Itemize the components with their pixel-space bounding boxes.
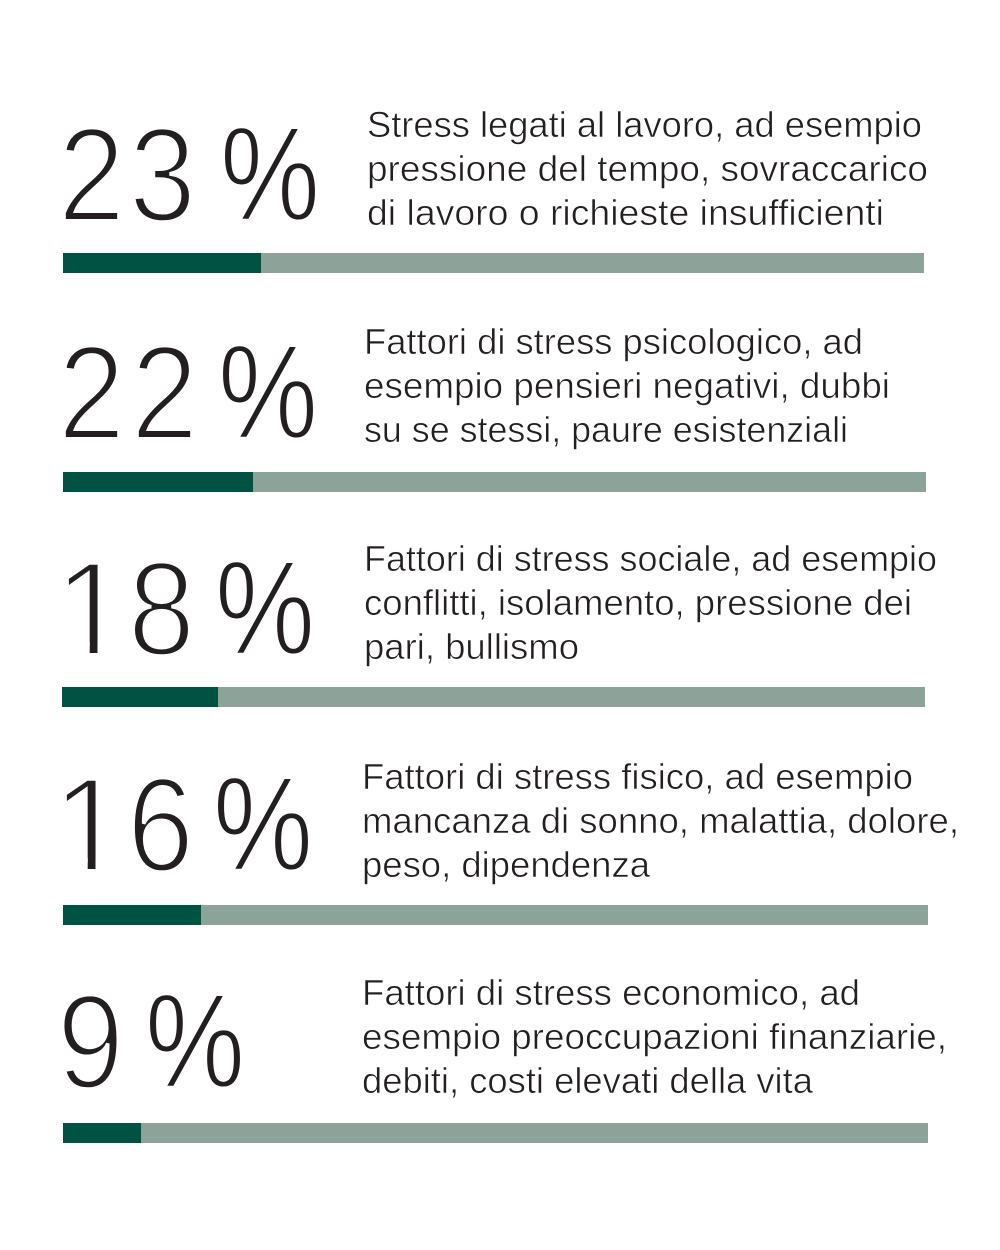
big number: 16 %: 6 bbox=[127, 751, 194, 900]
description: psychological stress: su se stessi, paure esistenziali bbox=[364, 409, 848, 450]
big number: 22 %: 2 bbox=[58, 319, 125, 468]
big number: 16 % bbox=[52, 750, 313, 900]
description: psychological stress: esempio pensieri negativi, dubbi bbox=[364, 365, 890, 406]
description: physical stress: mancanza di sonno, malattia, dolore, bbox=[362, 800, 959, 841]
row: 9% economic stress bbox=[57, 967, 947, 1143]
description: physical stress: Fattori di stress fisico, ad esempio bbox=[362, 756, 913, 797]
progress bar: 18% bbox=[62, 687, 925, 707]
big number: 22 %: % bbox=[218, 318, 318, 467]
big number: 18 %: 1 bbox=[54, 535, 129, 684]
description: social stress bbox=[364, 538, 937, 667]
description: work stress: di lavoro o richieste insufficienti bbox=[367, 192, 884, 233]
progress bar: 16% bbox=[63, 905, 928, 925]
big number: 22 %: 2 bbox=[131, 319, 198, 468]
description: work stress: Stress legati al lavoro, ad esempio bbox=[367, 104, 922, 145]
big number: 23 %: 3 bbox=[129, 101, 196, 250]
big number: 22 % bbox=[58, 318, 318, 468]
row: 18% social stress bbox=[54, 534, 937, 707]
description: psychological stress: Fattori di stress psicologico, ad bbox=[364, 321, 863, 362]
big number: 9 % bbox=[57, 967, 245, 1117]
description: economic stress: Fattori di stress economico, ad bbox=[362, 972, 860, 1013]
big number: 18 %: 8 bbox=[128, 535, 195, 684]
big number: 18 %: % bbox=[215, 534, 315, 683]
description: social stress: conflitti, isolamento, pressione dei bbox=[364, 582, 912, 623]
description: physical stress: peso, dipendenza bbox=[362, 844, 651, 885]
big number: 23 % bbox=[58, 100, 320, 250]
big number: 16 %: % bbox=[213, 750, 313, 899]
row: 22% psychological stress bbox=[58, 318, 926, 492]
progress bar: 9% bbox=[63, 1123, 928, 1143]
big number: 16 %: 1 bbox=[52, 751, 127, 900]
description: work stress: pressione del tempo, sovraccarico bbox=[367, 148, 928, 189]
row: 16% physical stress bbox=[52, 750, 959, 925]
description: economic stress: debiti, costi elevati della vita bbox=[362, 1060, 814, 1101]
description: physical stress bbox=[362, 756, 959, 885]
big number: 23 %: % bbox=[220, 100, 320, 249]
description: social stress: Fattori di stress sociale, ad esempio bbox=[364, 538, 937, 579]
progress bar: 23% bbox=[63, 253, 924, 273]
big number: 18 % bbox=[54, 534, 315, 684]
description: social stress: pari, bullismo bbox=[364, 626, 579, 667]
row: 23% work stress bbox=[58, 100, 928, 273]
description: psychological stress bbox=[364, 321, 890, 450]
big number: 23 %: 2 bbox=[58, 101, 125, 250]
big number: 9 %: 9 bbox=[57, 968, 124, 1117]
description: work stress bbox=[367, 104, 928, 233]
description: economic stress: esempio preoccupazioni finanziarie, bbox=[362, 1016, 947, 1057]
big number: 9 %: % bbox=[145, 967, 245, 1116]
progress bar: 22% bbox=[63, 472, 926, 492]
description: economic stress bbox=[362, 972, 947, 1101]
